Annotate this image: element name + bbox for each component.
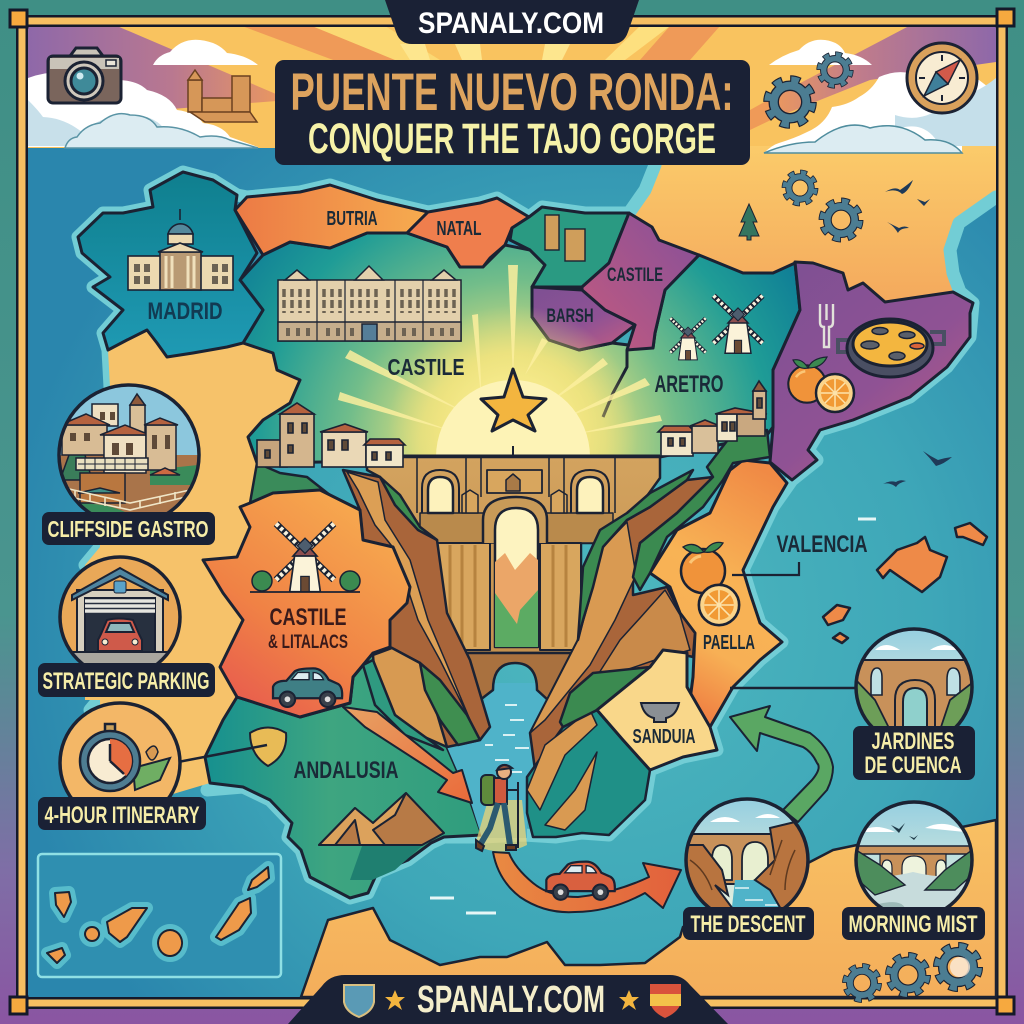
cloud: right large (764, 72, 996, 153)
backpack (481, 775, 496, 805)
label: Jardines de Cuenca: DE CUENCA (864, 752, 962, 779)
cloud: left large (28, 72, 258, 147)
region: left interior land (85, 330, 300, 797)
cloud: top left small (153, 40, 258, 65)
small shield icon (250, 728, 286, 766)
islands halo (47, 867, 269, 963)
illustration: domed building (128, 209, 233, 290)
gorge: river, bridge and cliffs (250, 430, 770, 838)
teal car on route (273, 668, 342, 707)
region: Castile purple (582, 213, 699, 350)
region: Catalonia purple (770, 262, 973, 480)
icon: pin and food (146, 746, 158, 760)
label: Castile purple: CASTILE (607, 265, 663, 286)
bridge (367, 446, 660, 700)
label: Aretro: ARETRO (654, 371, 724, 398)
icon: dish in Sanduia (641, 703, 679, 722)
icon: star right (619, 990, 639, 1010)
left cliff highlights (347, 472, 470, 720)
footer brand tab (288, 975, 728, 1024)
icon: tree right (340, 571, 360, 592)
hat (497, 765, 512, 770)
sky with sunburst (27, 26, 996, 148)
icon: star left (385, 990, 405, 1010)
icon: gear mid (890, 957, 926, 993)
region: Barsh (532, 287, 635, 350)
region: Paella (650, 460, 787, 727)
icon: shield (344, 985, 374, 1017)
icon: flag shield (650, 984, 681, 1018)
mountains in Andalusia (319, 793, 444, 880)
label: strategic parking: STRATEGIC PARKING (42, 668, 210, 695)
region: Andalusia (205, 653, 482, 898)
panel: map of regions (78, 172, 973, 898)
label: Natal: NATAL (436, 218, 482, 240)
medallion: cliffside gastro (42, 385, 215, 545)
label: strategic parking (38, 663, 215, 697)
valencia leader line (732, 562, 799, 575)
icon: orange fruit (788, 365, 826, 403)
label: Barsh: BARSH (546, 306, 594, 327)
icon: windmill (276, 524, 334, 592)
medallion: morning mist (842, 802, 985, 940)
icon: gold star (481, 369, 546, 431)
sea dashes (430, 519, 876, 913)
icon: orange half (699, 585, 739, 625)
hiker (475, 765, 527, 852)
route arrow to hiker (343, 707, 472, 803)
right cliff highlight (530, 522, 636, 733)
lower left wedge (373, 648, 447, 747)
inset map (38, 854, 281, 977)
sea background (27, 146, 996, 998)
lower left green patch (420, 663, 480, 745)
illustration: royal palace (278, 266, 461, 341)
label: the descent (683, 907, 814, 940)
cloud: right front (764, 125, 962, 153)
label: 4-hour itinerary: 4-HOUR ITINERARY (44, 802, 200, 829)
cloud: top right small (769, 40, 872, 65)
head (497, 765, 511, 779)
glow (475, 800, 527, 852)
label: 4-hour itinerary (38, 797, 206, 830)
clouds (28, 40, 996, 153)
cloud: right shading (895, 78, 996, 146)
cloud: left shading (28, 100, 165, 146)
region: Butria (235, 185, 428, 255)
label: Sanduia: SANDUIA (632, 726, 696, 748)
label: Andalusia: ANDALUSIA (294, 757, 398, 784)
lower right vegetation (560, 667, 650, 727)
icon: orange leaves (683, 542, 723, 553)
boots (476, 840, 516, 851)
icon: pine tree (739, 204, 759, 240)
region: Sanduia (597, 650, 717, 770)
illustration: towers (545, 215, 585, 261)
header brand tab (385, 0, 639, 44)
central labels (268, 208, 868, 784)
label: Castile & Litalacs line 2: & LITALACS (268, 632, 348, 653)
island: Formentera (833, 633, 848, 643)
icon: gear small (820, 55, 850, 85)
paella and oranges (788, 304, 944, 412)
region: Natal (407, 198, 529, 267)
bottom gears (846, 947, 978, 999)
icons: birds in mist (891, 823, 918, 840)
islands (47, 867, 269, 963)
icon: gear lower (823, 202, 859, 238)
glint (950, 957, 970, 977)
right cliff (530, 477, 713, 770)
left cliff (343, 470, 490, 747)
label: Butria: BUTRIA (326, 208, 378, 230)
left cliff vegetation (250, 463, 360, 510)
curved route arrow (493, 852, 681, 912)
label: cliffside gastro: CLIFFSIDE GASTRO (48, 516, 208, 542)
windmill in Castile (250, 524, 360, 592)
icon: map sheet (133, 758, 170, 790)
title panel (275, 60, 750, 165)
birds and tree (739, 180, 952, 487)
left hill town (257, 403, 405, 467)
right cliff vegetation lower (633, 430, 770, 590)
left cliff vegetation band (380, 477, 437, 540)
label: the descent: THE DESCENT (690, 911, 806, 938)
icon: compass (907, 43, 977, 113)
icons: birds (883, 180, 952, 487)
footer brand text: SPANALY.COM (417, 979, 605, 1021)
red car (546, 862, 615, 900)
body (494, 778, 507, 804)
label: morning mist: MORNING MIST (848, 911, 978, 938)
icon: fork (820, 304, 833, 347)
icon: camera (48, 48, 121, 103)
green curved arrow (730, 706, 833, 822)
coastal halo (78, 165, 996, 898)
legs (480, 803, 510, 845)
river ripples (485, 705, 529, 772)
icon: orange leaves (793, 357, 827, 368)
region: Northern green (510, 207, 629, 287)
island: Mallorca (877, 537, 947, 592)
medallion: 4-hour itinerary (38, 703, 206, 830)
label: Madrid: MADRID (148, 298, 222, 325)
island: Ibiza (823, 605, 850, 625)
sun glow and rays (338, 265, 662, 555)
islands (823, 523, 987, 643)
lower right wedge (527, 710, 650, 837)
arm and pole (506, 782, 518, 848)
icon: gear mid (785, 173, 815, 203)
gears (768, 55, 859, 238)
leader line to shield (178, 745, 267, 762)
icon: tree left (252, 571, 272, 592)
medallion: strategic parking (38, 557, 215, 697)
icon: orange slice (816, 374, 854, 412)
label: Castile & Litalacs line 1: CASTILE (270, 604, 346, 631)
title line 1: PUENTE NUEVO RONDA: (290, 63, 734, 122)
ground line (250, 591, 360, 593)
label: Valencia: VALENCIA (776, 531, 868, 558)
medallion: the descent (683, 799, 814, 940)
right hill town (658, 381, 767, 456)
icon: red car front (98, 618, 142, 651)
label: morning mist (842, 907, 985, 940)
icon: stopwatch (80, 724, 140, 791)
icon: gear small (846, 967, 878, 999)
right cliff vegetation upper (578, 470, 693, 640)
top right land mass (629, 146, 996, 302)
icon: paella pan (838, 319, 944, 377)
region: central and Aretro (240, 233, 800, 463)
oranges in Paella region (681, 542, 739, 625)
Aretro border line (603, 350, 627, 417)
title line 2: CONQUER THE TAJO GORGE (308, 115, 716, 163)
region: Madrid (78, 172, 263, 357)
windmills in Aretro (670, 296, 762, 360)
medallion: Jardines de Cuenca (853, 629, 975, 780)
cloud: left front (65, 114, 258, 148)
icon: gear large (938, 947, 978, 987)
label: Castile central: CASTILE (388, 354, 464, 380)
icon: orange fruit (681, 549, 725, 593)
right cliff highlight lower (585, 590, 690, 695)
header brand text: SPANALY.COM (418, 7, 604, 40)
river (447, 683, 560, 838)
illustration: distant castle (188, 70, 257, 122)
Madrid label and palace (128, 209, 233, 325)
icon: small windmill (670, 318, 706, 360)
label: cliffside gastro (42, 512, 215, 545)
island: Menorca (955, 523, 987, 545)
label: Jardines de Cuenca: JARDINES (872, 728, 954, 755)
bottom land (301, 820, 996, 997)
icon: large windmill (714, 296, 762, 353)
label: Jardines de Cuenca (853, 726, 975, 780)
leader line to Jardines (730, 687, 858, 689)
lower left teal wedge (363, 660, 443, 750)
lower right rock (527, 710, 597, 830)
region: Castile & Litalacs (203, 490, 410, 717)
icon: gear large (768, 80, 812, 124)
label: Paella: PAELLA (703, 632, 755, 654)
